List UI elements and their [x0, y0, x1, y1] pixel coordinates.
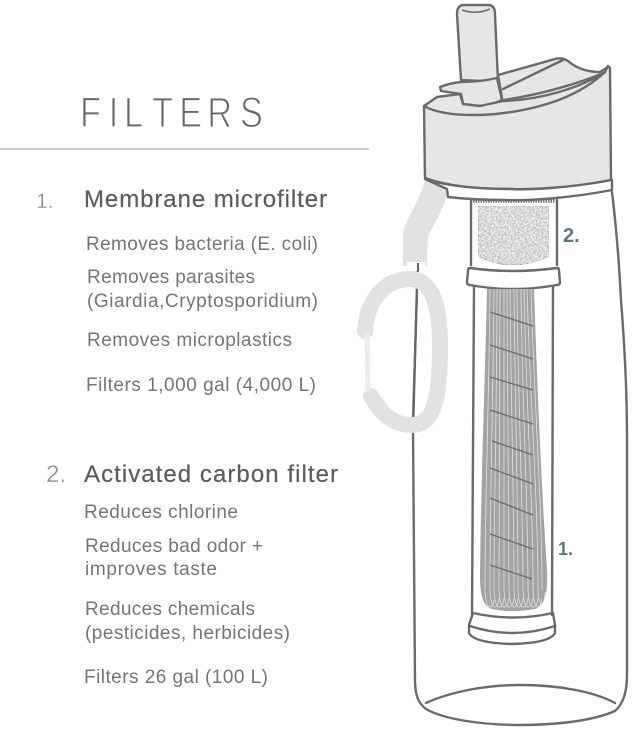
- bottle body: [413, 192, 627, 725]
- benefit: chlorine: Reduces chlorine: [84, 502, 238, 523]
- filter housing: [467, 198, 560, 644]
- benefit: parasites: (Giardia,Cryptosporidium): [87, 291, 318, 312]
- section: membrane microfilter: [36, 186, 327, 396]
- lower tube: [472, 286, 553, 615]
- upper tube: [471, 198, 557, 265]
- title: FILTERS: [80, 89, 263, 137]
- benefit: odor and taste: improves taste: [85, 559, 217, 580]
- benefit: chemicals: (pesticides, herbicides): [85, 623, 290, 644]
- bottle base ellipse: [426, 685, 615, 703]
- middle ring: [467, 268, 560, 289]
- benefit: bacteria: Removes bacteria (E. coli): [86, 234, 318, 255]
- straw: [457, 5, 498, 82]
- benefit: microplastics: Removes microplastics: [87, 330, 292, 351]
- section: activated carbon filter: [46, 461, 338, 688]
- bottle illustration: [365, 5, 627, 725]
- flip lid flap: [498, 58, 608, 104]
- cap: [424, 58, 612, 200]
- callout 2: 2.: [563, 225, 580, 247]
- activated carbon filter: [478, 206, 549, 265]
- carabiner strap: [365, 180, 449, 425]
- callout 1: 1.: [558, 539, 573, 559]
- benefit: odor and taste: Reduces bad odor +: [85, 536, 263, 557]
- carbon top mesh: [473, 199, 555, 203]
- binding lines: [490, 312, 533, 579]
- cap top curve: [424, 72, 605, 115]
- heading: activated carbon filter: Activated carbon filter: [84, 461, 338, 488]
- section number 2: 2.: [46, 461, 66, 488]
- bottom flange: [469, 613, 555, 644]
- carabiner gate: [367, 332, 368, 392]
- capacity: carbon: Filters 26 gal (100 L): [84, 667, 268, 688]
- strap loop: [407, 262, 425, 271]
- heading: membrane microfilter: Membrane microfilter: [84, 186, 327, 213]
- cap body: [424, 66, 611, 189]
- membrane microfilter: [480, 289, 547, 611]
- inner bottle line through carabiner: [413, 291, 417, 417]
- carabiner ring: [365, 279, 440, 425]
- cap collar: [425, 179, 612, 200]
- straw collar: [440, 78, 502, 106]
- benefit: chemicals: Reduces chemicals: [85, 599, 255, 620]
- section number 1: 1.: [36, 190, 54, 213]
- capacity: membrane: Filters 1,000 gal (4,000 L): [86, 375, 316, 396]
- benefit: parasites: Removes parasites: [87, 267, 255, 288]
